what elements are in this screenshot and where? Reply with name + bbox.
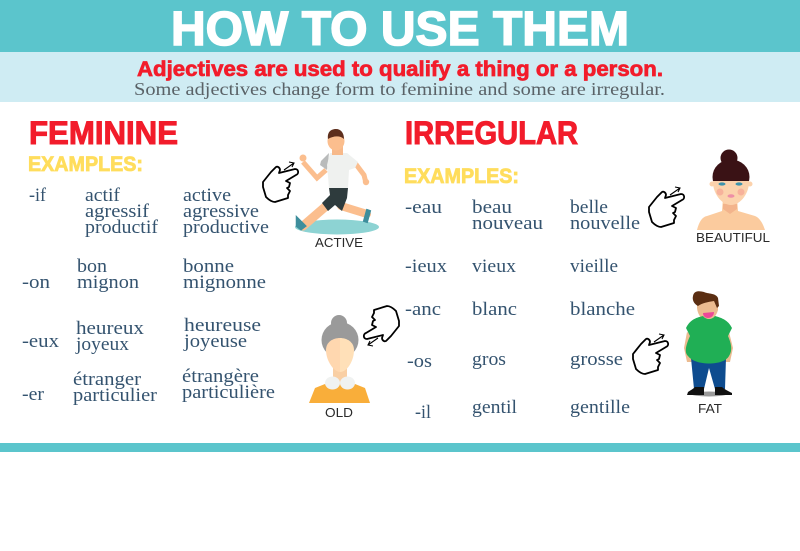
row: -os: grosse: [570, 349, 623, 370]
intro headline: Adjectives are used to qualify a thing or a person.: [137, 58, 663, 81]
row: -on: bon: [77, 256, 108, 277]
footer bar: [0, 443, 800, 452]
heading: irregular: IRREGULAR: [405, 115, 578, 151]
row: -ieux: [405, 256, 618, 277]
row: -er: étranger: [73, 369, 142, 390]
row: -os: [407, 349, 623, 372]
row: -ieux: vieille: [570, 256, 618, 277]
icon: fat man: [684, 291, 733, 396]
row: -on: mignonne: [183, 272, 266, 293]
panel: feminine: [22, 115, 275, 406]
label: active: ACTIVE: [315, 235, 363, 250]
icon: beautiful woman: [697, 150, 765, 230]
examples label: EXAMPLES:: [28, 153, 143, 176]
intro text: Some adjectives change form to feminine and some are irregular.: [134, 79, 665, 99]
label: old: OLD: [325, 405, 353, 420]
row: -on: bonne: [183, 256, 234, 277]
row: -er: étrangère: [182, 366, 259, 387]
row: -er: particulier: [73, 385, 158, 406]
icon: pointing hand to old woman: [364, 306, 399, 346]
row: -er: particulière: [182, 382, 275, 403]
row: -eux: joyeux: [75, 334, 130, 355]
row: -eau: beau: [472, 197, 513, 218]
icon: pointing hand to woman: [649, 187, 684, 227]
row: -il: gentille: [570, 397, 630, 418]
row: -eau: nouvelle: [570, 213, 640, 234]
row: -anc: blanc: [472, 299, 517, 320]
icon: pointing hand to fat man: [633, 334, 668, 374]
row: -er: -er: [22, 384, 45, 405]
row: -if: agressif: [85, 201, 150, 222]
row: -eux: [22, 315, 261, 355]
label: beautiful: BEAUTIFUL: [696, 230, 770, 245]
title: HOW TO USE THEM: [171, 3, 629, 56]
row: -ieux: vieux: [472, 256, 517, 277]
row: -os: -os: [407, 351, 432, 372]
row: -eux: heureuse: [184, 315, 261, 336]
row: -eau: -eau: [405, 197, 443, 218]
row: -eau: belle: [570, 197, 608, 218]
row: -if: [29, 185, 269, 238]
row: -if: active: [183, 185, 231, 206]
icon: old woman: [309, 315, 370, 403]
label: fat: FAT: [698, 401, 722, 416]
row: -eux: joyeuse: [183, 331, 247, 352]
row: -anc: [405, 299, 635, 320]
icon: running man: [295, 129, 379, 234]
heading: feminine: FEMININE: [29, 115, 178, 151]
row: -if: productive: [183, 217, 269, 238]
row: -on: [22, 256, 266, 293]
row: -il: gentil: [472, 397, 517, 418]
icon: pointing hand to runner: [263, 162, 298, 202]
title banner: [0, 0, 800, 56]
row: -if: actif: [85, 185, 121, 206]
row: -ieux: -ieux: [405, 256, 448, 277]
row: -il: [415, 397, 630, 423]
examples label: EXAMPLES:: [404, 165, 519, 188]
panel: irregular: [404, 115, 640, 423]
row: -anc: blanche: [570, 299, 635, 320]
row: -os: gros: [472, 349, 506, 370]
row: -on: mignon: [77, 272, 140, 293]
row: -if: agressive: [183, 201, 259, 222]
row: -er: [22, 366, 275, 406]
row: -il: -il: [415, 402, 431, 423]
row: -on: -on: [22, 272, 51, 293]
row: -eau: [405, 197, 640, 234]
row: -eux: heureux: [76, 318, 145, 339]
row: -eau: nouveau: [472, 213, 544, 234]
row: -anc: -anc: [405, 299, 441, 320]
intro band: [0, 52, 800, 102]
row: -if: productif: [85, 217, 159, 238]
row: -if: -if: [29, 185, 47, 206]
row: -eux: -eux: [22, 331, 60, 352]
